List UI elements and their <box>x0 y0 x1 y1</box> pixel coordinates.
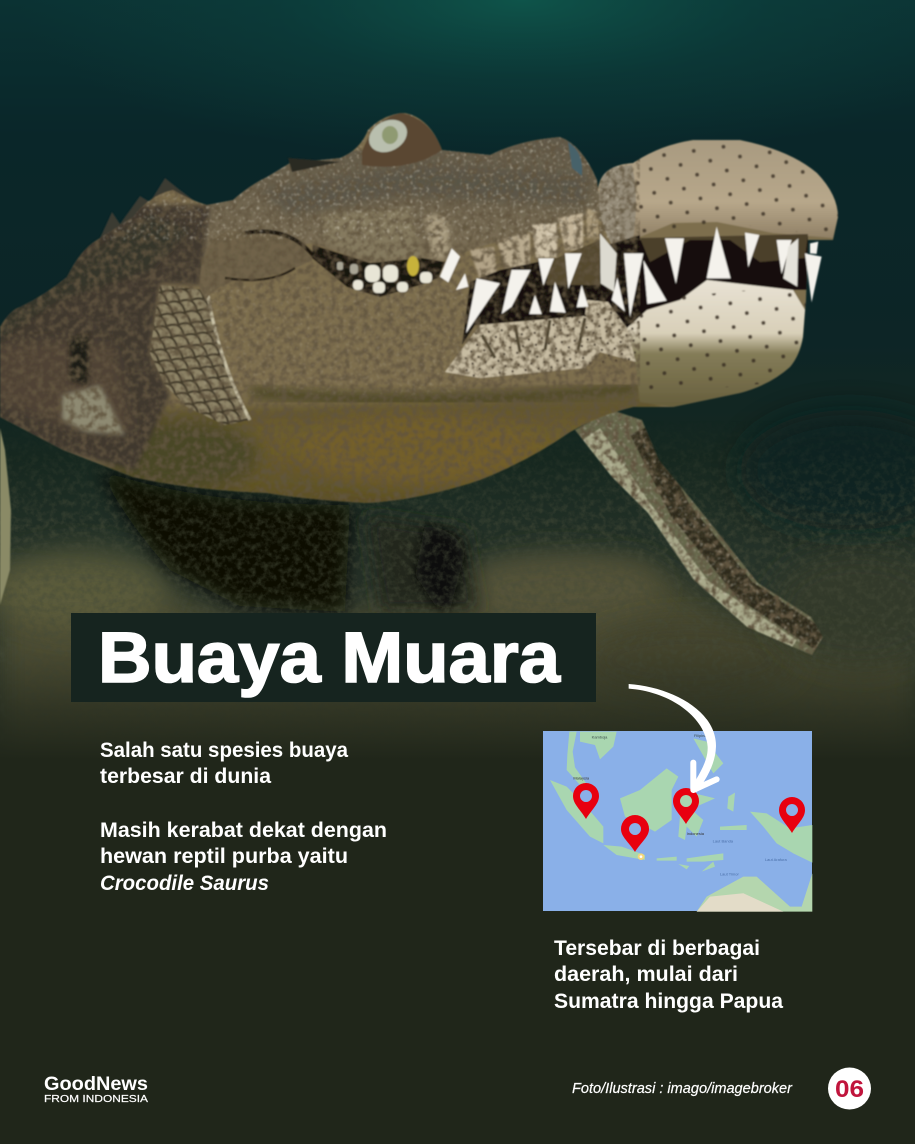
map labels: Laut Arafura <box>765 857 787 862</box>
rear body dark <box>0 205 210 470</box>
pin: Sulawesi <box>673 788 699 824</box>
seabed sand <box>0 560 915 780</box>
right caption <box>554 937 783 1013</box>
bottom fade <box>0 650 915 760</box>
sumatra <box>550 780 603 843</box>
shadow below body <box>100 470 350 612</box>
neck scales <box>150 285 250 425</box>
snout upper <box>598 140 838 243</box>
texture <box>0 110 640 510</box>
logo: GoodNews from Indonesia: GoodNews <box>44 1073 148 1095</box>
map labels: Malaysia <box>573 776 590 781</box>
sulawesi <box>677 790 715 840</box>
right caption: Tersebar di berbagai <box>554 937 760 960</box>
page number badge: 06 <box>835 1076 864 1103</box>
pin: Java <box>621 815 649 852</box>
lower jaw mid <box>445 300 636 378</box>
java <box>603 845 645 860</box>
borneo <box>620 768 678 832</box>
maluku <box>727 793 735 812</box>
photo credit: Foto/Ilustrasi : imago/imagebroker <box>572 1081 793 1097</box>
map labels: Indonesia <box>687 831 705 836</box>
second eye dome <box>568 142 582 176</box>
malay peninsula <box>567 732 587 785</box>
title: Buaya Muara <box>98 619 561 698</box>
australia <box>697 873 812 912</box>
map labels: Laut Timor <box>720 872 739 877</box>
left text block <box>100 739 387 895</box>
rear mouth gap <box>312 245 445 297</box>
upper head <box>210 138 600 264</box>
yellow tooth <box>407 256 419 276</box>
mouth interior mid <box>462 235 640 345</box>
left text block: Salah satu spesies buaya <box>100 739 348 762</box>
philippines <box>693 738 723 773</box>
logo: GoodNews from Indonesia <box>44 1073 148 1105</box>
left text block: Crocodile Saurus <box>100 872 269 895</box>
indochina <box>580 732 617 759</box>
nusa tenggara <box>657 857 677 861</box>
arrow to map <box>629 684 717 793</box>
jowl fold <box>200 231 312 300</box>
front leg <box>574 411 823 655</box>
mouth interior front <box>634 236 809 316</box>
title banner <box>71 613 596 702</box>
crocodile illustration <box>0 110 860 660</box>
body and head base <box>0 110 860 530</box>
lower jaw front <box>627 280 805 407</box>
map labels: Laut Banda <box>713 839 734 844</box>
page number badge <box>828 1068 871 1110</box>
photo background: water and seabed <box>0 0 915 736</box>
right caption: Sumatra hingga Papua <box>554 990 783 1013</box>
upper jaw lobes <box>470 208 599 280</box>
big teeth <box>440 227 822 333</box>
right caption: daerah, mulai dari <box>554 963 738 986</box>
map labels <box>573 733 787 877</box>
map labels: Filipina <box>694 733 707 738</box>
left text block: Masih kerabat dekat dengan <box>100 819 387 842</box>
left text block: terbesar di dunia <box>100 765 271 788</box>
papua <box>750 812 812 863</box>
crest spikes <box>100 178 200 238</box>
pin: Papua <box>779 797 805 833</box>
eye on top of head <box>288 113 442 172</box>
small rear teeth <box>337 262 432 293</box>
left text block: hewan reptil purba yaitu <box>100 845 348 868</box>
map of Indonesia <box>543 731 812 912</box>
far hind leg <box>0 428 11 605</box>
pin: Sumatra <box>573 783 599 819</box>
map labels: Kamboja <box>592 735 608 740</box>
belly <box>142 394 662 504</box>
logo: GoodNews from Indonesia: FROM INDONESIA <box>44 1093 148 1105</box>
